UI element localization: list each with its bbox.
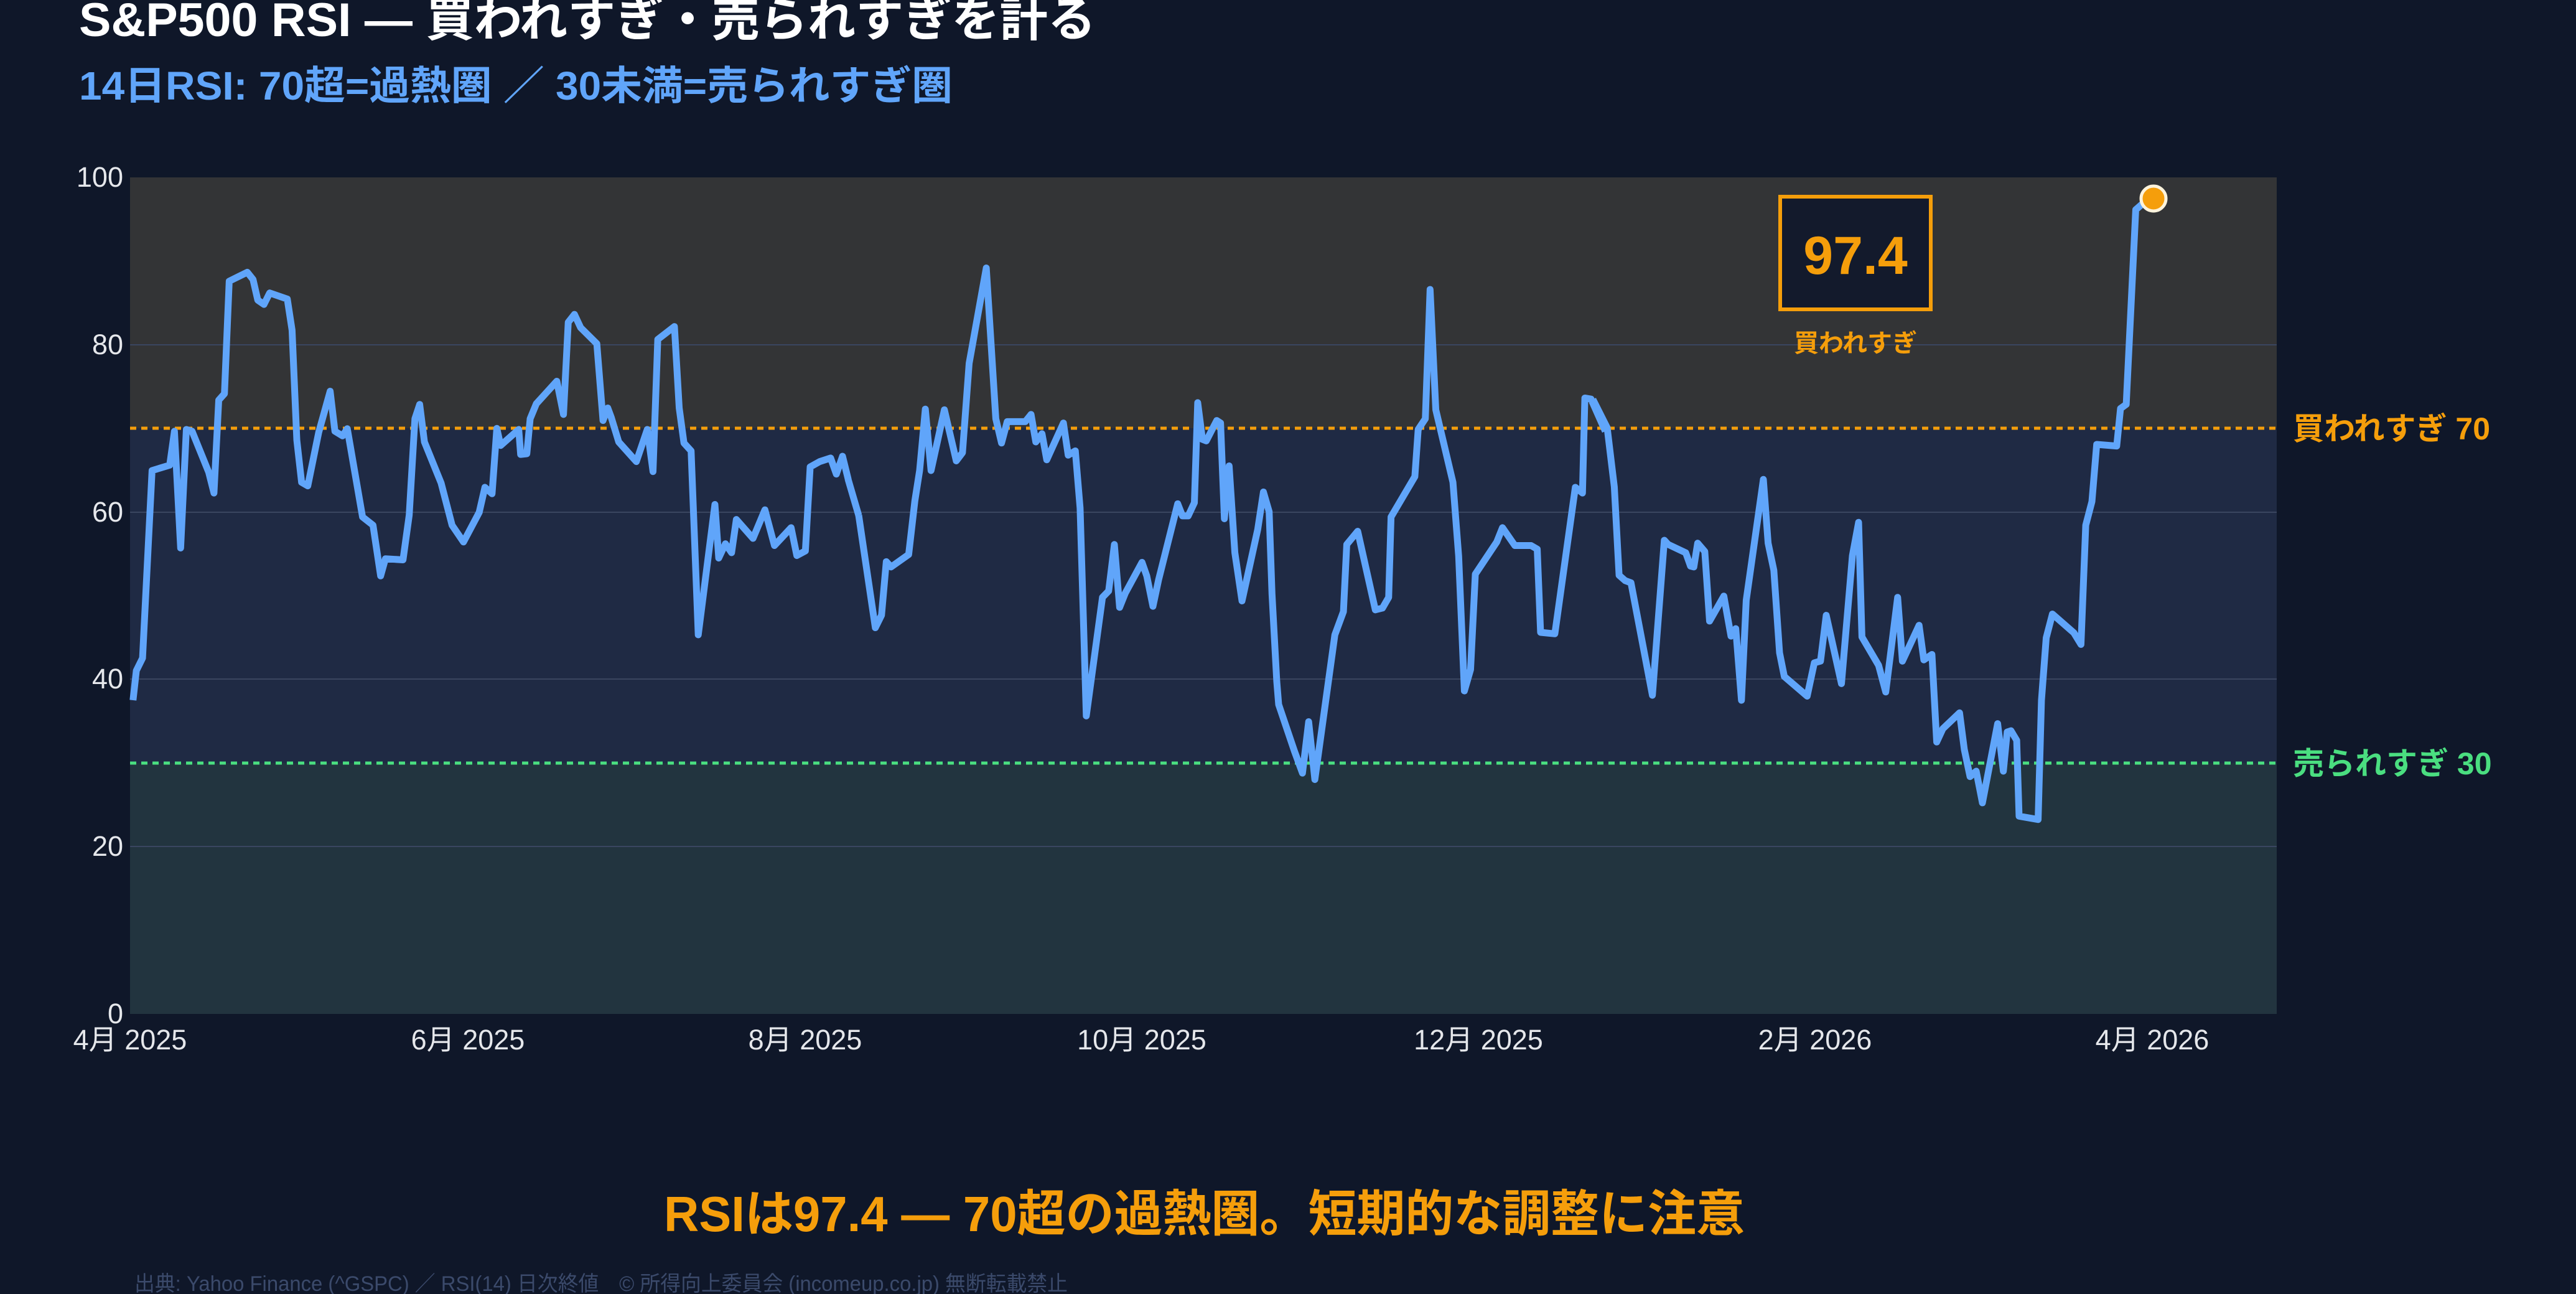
- chart: [73, 161, 2492, 1056]
- x axis labels: 4月 2026: [2096, 1024, 2209, 1056]
- label: overbought 70: 買われすぎ 70: [2293, 411, 2490, 446]
- x axis labels: 10月 2025: [1077, 1024, 1206, 1056]
- label: oversold 30: 売られすぎ 30: [2293, 746, 2492, 781]
- RSI line: [133, 199, 2148, 820]
- x axis labels: [73, 1024, 2209, 1056]
- threshold line 30: [130, 762, 2277, 764]
- y axis labels: 60: [92, 496, 123, 528]
- y axis labels: 0: [108, 998, 123, 1029]
- latest point marker: [2141, 186, 2166, 211]
- threshold line 70: [130, 427, 2277, 429]
- x axis labels: 12月 2025: [1414, 1024, 1543, 1056]
- x axis labels: 2月 2026: [1758, 1024, 1872, 1056]
- x axis labels: 6月 2025: [411, 1024, 525, 1056]
- conclusion text: RSIは97.4 — 70超の過熱圏。短期的な調整に注意: [664, 1186, 1745, 1242]
- x axis labels: 4月 2025: [73, 1024, 187, 1056]
- y axis labels: [77, 161, 123, 1029]
- zone: overbought: [130, 177, 2277, 428]
- callout: 97.4: 97.4: [1803, 226, 1908, 286]
- subtitle: 14日RSI: 70超=過熱圏 ／ 30未満=売られすぎ圏: [79, 63, 953, 108]
- y axis labels: 20: [92, 830, 123, 862]
- x axis labels: 8月 2025: [749, 1024, 862, 1056]
- zone: neutral: [130, 428, 2277, 763]
- callout: 97.4: 買われすぎ: [1794, 330, 1917, 357]
- callout: 97.4: [1780, 197, 1931, 357]
- y axis labels: 40: [92, 663, 123, 695]
- y axis labels: 80: [92, 329, 123, 360]
- zone: oversold: [130, 763, 2277, 1014]
- y axis labels: 100: [77, 161, 123, 193]
